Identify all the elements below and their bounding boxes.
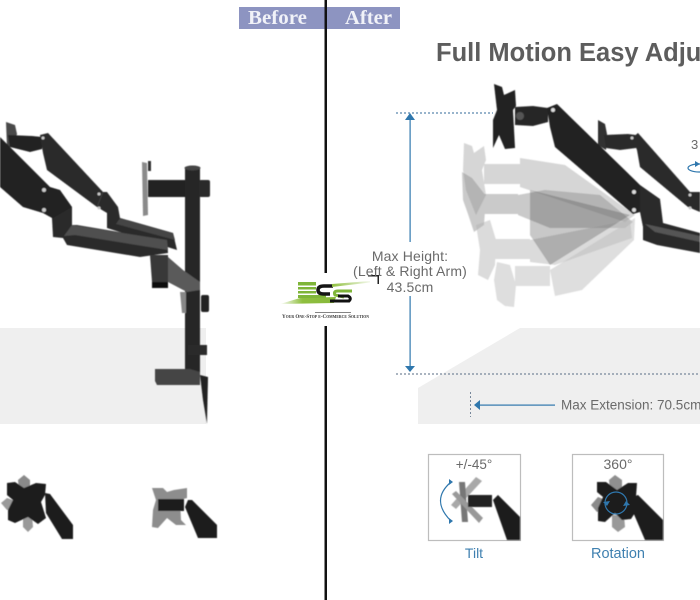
logo: ESS [280,275,379,320]
desk surface: before [0,328,206,424]
ghost 2 [462,172,633,232]
back arm [598,120,700,212]
front arm [0,137,200,292]
small monitor mount [142,161,210,216]
extension marker [470,392,472,417]
monitor arm: before [0,122,210,424]
height label [353,248,467,295]
ghost 3 [476,220,632,280]
logo corner mark [368,275,379,284]
tilt label: Tilt [465,545,483,561]
logo swoosh [280,297,336,304]
center divider lower [324,326,327,600]
ghost 4 [494,218,635,307]
rotation view: before [1,475,73,539]
rotation arrow [603,492,630,514]
rotation angle: 360° [604,456,632,472]
height label: (Left & Right Arm) [353,263,467,279]
extension label: Max Extension: 70.5cm [561,398,700,412]
tilt angle: +/-45° [456,457,492,472]
logo letter E [298,282,326,298]
label: after: After [345,7,392,29]
ghost 1 [463,143,635,222]
panel: after side [353,39,700,562]
desk surface: after [418,328,700,424]
height label: Max Height: [372,248,448,264]
tilt view: before [152,488,217,538]
title: Full Motion Easy Adju [436,39,700,67]
back arm [6,122,177,250]
main monitor arm: after [493,84,700,253]
height arrow [405,113,415,372]
panel: rotation [572,454,664,562]
tilt icon [451,477,520,540]
panel: tilt [428,454,520,561]
center divider upper [324,0,327,273]
tilt arrow [440,479,453,524]
panel: before side [0,122,210,424]
height label: 43.5cm [387,279,433,295]
rotation note [688,137,700,172]
front arm [493,84,700,253]
logo letter S black [330,296,350,301]
pole and clamp [155,166,209,424]
top dotted guide [396,112,493,114]
logo green accent [332,281,370,287]
rotation icon [591,475,663,540]
badge: before and after [239,7,400,29]
logo tagline: Your One-Stop e-Commerce Solution [282,314,369,320]
rotation label: Rotation [591,546,645,562]
bottom dotted guide [396,373,700,375]
ghost arm positions [462,143,635,307]
rotation note: 3 [691,137,698,152]
dark ghost overlap [530,190,630,265]
extension arrow [474,400,555,410]
logo letter S dark [318,286,333,294]
logo letter S green [334,291,352,297]
label: before: Before [248,7,307,29]
